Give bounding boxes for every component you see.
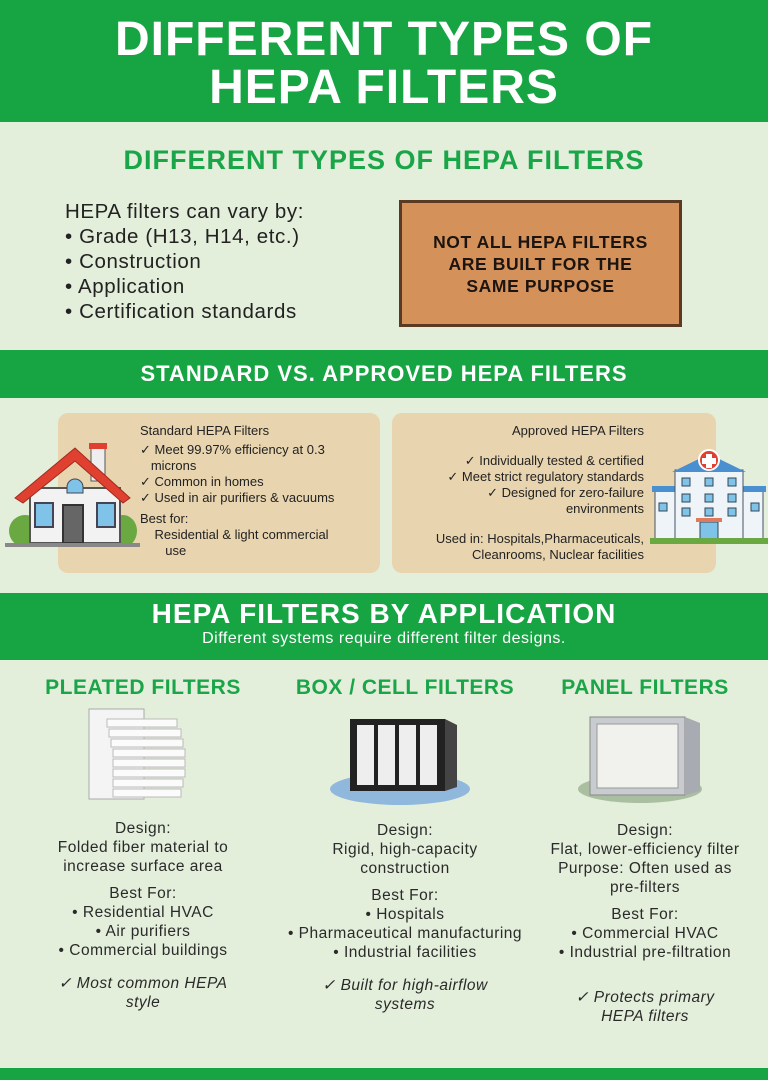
column: panel filters: ✓ Protects primary	[575, 989, 715, 1006]
panel: standard HEPA: microns	[151, 458, 196, 473]
text block: vary by list: • Application	[65, 275, 185, 298]
icon: house	[5, 443, 140, 547]
column: panel filters: • Industrial pre-filtration	[559, 944, 731, 961]
text block: vary by list	[65, 200, 304, 323]
panel: standard HEPA: ✓ Used in air purifiers & vacuums	[140, 490, 334, 505]
column: panel filters: Best For:	[611, 906, 679, 923]
text: panel details: Flat, lower-efficiency filter	[550, 841, 740, 858]
text: pleated details: increase surface area	[63, 858, 223, 875]
panel: standard HEPA: Residential & light commercial	[154, 527, 329, 542]
icon: pleated filter	[88, 708, 186, 800]
column: panel filters: HEPA filters	[601, 1008, 689, 1025]
text: pleated details: Folded fiber material to	[58, 839, 228, 856]
icon: box filter	[330, 719, 470, 805]
column: box cell filters: BOX / CELL FILTERS	[296, 676, 514, 699]
text block: vary by list: • Certification standards	[65, 300, 297, 323]
text: pleated details	[58, 820, 228, 875]
column: pleated filters: PLEATED FILTERS	[45, 676, 241, 699]
panel: approved HEPA: Cleanrooms, Nuclear facilities	[472, 547, 644, 562]
title banner: HEPA FILTERS	[209, 61, 559, 114]
title banner: DIFFERENT TYPES OF	[115, 13, 653, 66]
text: panel details: Purpose: Often used as	[558, 860, 732, 877]
column: box cell filters: • Industrial facilities	[333, 944, 477, 961]
title banner	[0, 0, 768, 122]
panel: approved HEPA: ✓ Designed for zero-failure	[487, 485, 644, 500]
column: panel filters	[550, 676, 740, 1025]
section heading: types: DIFFERENT TYPES OF HEPA FILTERS	[123, 145, 645, 175]
icon: hospital	[650, 449, 768, 544]
panel: approved HEPA: ✓ Individually tested & certified	[465, 453, 644, 468]
column: box cell filters: systems	[375, 996, 435, 1013]
column: box cell filters	[288, 676, 522, 1013]
text: panel details: pre-filters	[610, 879, 680, 896]
panel: standard HEPA: Standard HEPA Filters	[140, 423, 269, 438]
footer band	[0, 1068, 768, 1080]
text: box details: construction	[360, 860, 450, 877]
panel: standard HEPA: ✓ Meet 99.97% efficiency at 0.3	[140, 442, 325, 457]
callout: wood sign: ARE BUILT FOR THE	[449, 254, 632, 274]
panel: standard HEPA: use	[165, 543, 186, 558]
panel: approved HEPA	[392, 413, 716, 573]
text: box details	[332, 822, 478, 877]
column: pleated filters: • Residential HVAC	[72, 904, 214, 921]
text block: vary by list: • Construction	[65, 250, 201, 273]
section band: standard vs approved: STANDARD VS. APPROVED HEPA FILTERS	[140, 361, 628, 386]
panel: approved HEPA: environments	[566, 501, 644, 516]
column: pleated filters: • Commercial buildings	[59, 942, 227, 959]
section band: by application: Different systems require different filter designs.	[202, 630, 566, 647]
text: pleated details: Design:	[115, 820, 171, 837]
section band: by application: HEPA FILTERS BY APPLICATION	[152, 598, 616, 629]
section band: standard vs approved	[0, 350, 768, 398]
panel: approved HEPA: Approved HEPA Filters	[512, 423, 644, 438]
panel: approved HEPA: ✓ Meet strict regulatory standards	[447, 469, 644, 484]
text: panel details: Design:	[617, 822, 673, 839]
column: box cell filters: • Hospitals	[366, 906, 444, 923]
callout: wood sign	[399, 200, 682, 327]
column: pleated filters: style	[126, 994, 160, 1011]
panel: standard HEPA: Best for:	[140, 511, 188, 526]
column: panel filters: • Commercial HVAC	[571, 925, 719, 942]
column: box cell filters: • Pharmaceutical manufacturing	[288, 925, 522, 942]
text: box details: Design:	[377, 822, 433, 839]
text block: vary by list: • Grade (H13, H14, etc.)	[65, 225, 300, 248]
column: pleated filters: • Air purifiers	[96, 923, 190, 940]
icon: panel filter	[578, 716, 702, 803]
column: pleated filters: ✓ Most common HEPA	[58, 975, 228, 992]
column: panel filters: PANEL FILTERS	[561, 676, 729, 699]
column: pleated filters: Best For:	[109, 885, 177, 902]
column: pleated filters	[45, 676, 241, 1011]
column: box cell filters: Best For:	[371, 887, 439, 904]
panel: standard HEPA: ✓ Common in homes	[140, 474, 264, 489]
callout: wood sign: NOT ALL HEPA FILTERS	[433, 232, 648, 252]
text: panel details	[550, 822, 740, 896]
callout: wood sign: SAME PURPOSE	[466, 276, 615, 296]
section band: by application	[0, 593, 768, 660]
text: box details: Rigid, high-capacity	[332, 841, 478, 858]
panel: approved HEPA: Used in: Hospitals,Pharmaceuticals,	[436, 531, 644, 546]
panel: standard HEPA	[58, 413, 380, 573]
column: box cell filters: ✓ Built for high-airflow	[322, 977, 488, 994]
text block: vary by list: HEPA filters can vary by:	[65, 200, 304, 223]
